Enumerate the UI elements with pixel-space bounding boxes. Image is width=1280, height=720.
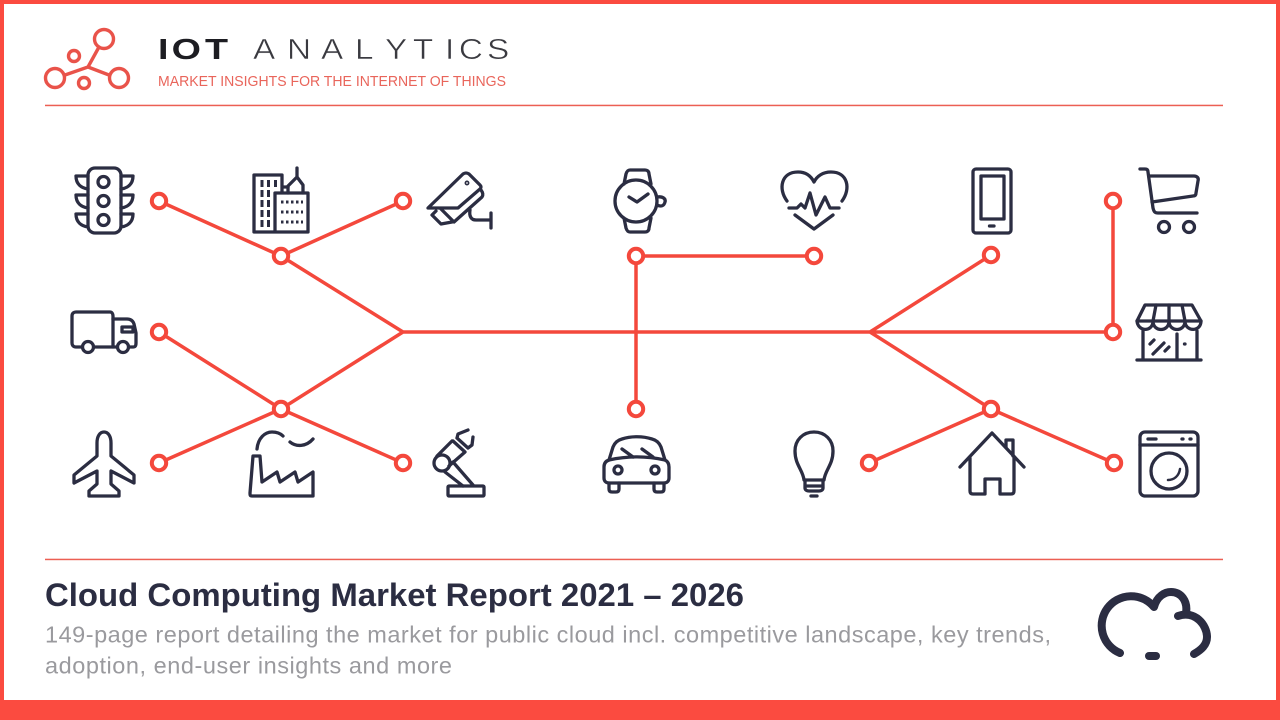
icon: security camera [428,173,491,228]
icon: house [960,433,1024,494]
icon: cloud [1102,592,1207,656]
network diagram [152,194,1121,470]
icon: light bulb [795,432,833,496]
icon: robot arm [434,430,484,496]
icon: factory with smoke [250,432,313,496]
report description: adoption, end-user insights and more [45,652,452,678]
icon: city buildings [254,168,308,232]
icon: washing machine [1140,432,1198,496]
icon: heart with pulse [782,172,847,229]
logo icon: connected nodes [46,30,128,88]
network connecting lines [159,201,1114,463]
icon: smartphone [973,169,1011,233]
report title: Cloud Computing Market Report 2021 – 2026 [45,577,744,613]
icon: delivery truck [72,312,136,352]
logo tagline: MARKET INSIGHTS FOR THE INTERNET OF THINGS [158,73,506,90]
icon: traffic light [76,168,133,233]
logo wordmark: ANALYTICS: ANALYTICS [253,33,509,65]
icon: storefront [1137,305,1201,360]
icon: wristwatch [615,170,665,232]
report description: 149-page report detailing the market for public cloud incl. competitive landscape, key trends, [45,622,1051,648]
icon: shopping cart [1140,169,1198,232]
logo wordmark: IOT: IOT [158,34,229,66]
logo: IoT Analytics [46,30,509,90]
icon: airplane [74,432,134,496]
icon: car [604,437,669,492]
network nodes [152,194,1121,470]
